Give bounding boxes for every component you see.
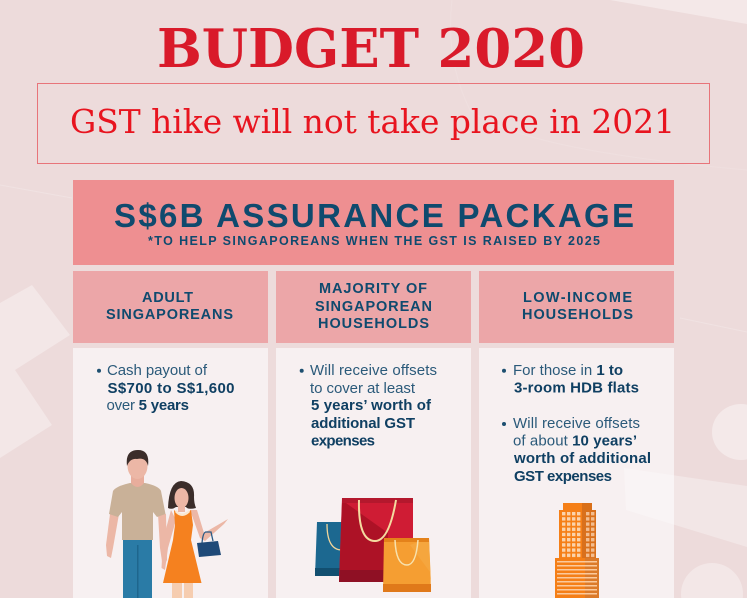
text block: over 5 years — [106, 397, 189, 414]
package note: *TO HELP SINGAPOREANS WHEN THE GST IS RAISED BY 2025 — [148, 234, 600, 248]
text block: Cash payout of — [107, 362, 208, 379]
text block: expenses — [311, 432, 375, 450]
panel: adult singaporeans — [73, 271, 268, 598]
column header — [479, 271, 674, 343]
column header: LOW-INCOME — [523, 290, 632, 306]
text block: 3-room HDB flats — [514, 380, 639, 396]
title: BUDGET 2020 — [157, 18, 585, 80]
icon: HDB tower — [555, 503, 599, 598]
panel: assurance package banner — [73, 180, 674, 265]
text block: GST expenses — [514, 468, 612, 485]
heading: package name: S$6B ASSURANCE PACKAGE — [114, 197, 634, 234]
column header: SINGAPOREANS — [106, 307, 233, 323]
subtitle box — [38, 84, 710, 164]
orange bag — [383, 538, 431, 592]
column body — [479, 348, 674, 598]
text block: to cover at least — [310, 380, 416, 397]
text block: Will receive offsets — [513, 415, 640, 432]
red bag — [339, 498, 413, 582]
text block: Will receive offsets — [310, 362, 437, 379]
text block: worth of additional — [513, 450, 651, 467]
icon: couple — [106, 450, 228, 598]
text block: 5 years’ worth of — [311, 397, 432, 414]
blue bag — [315, 522, 342, 576]
text block — [502, 362, 651, 485]
man — [106, 514, 119, 558]
text block — [97, 362, 234, 414]
text block: For those in 1 to — [513, 362, 623, 379]
column header: ADULT — [142, 290, 193, 306]
subtitle box: GST hike will not take place in 2021 — [70, 102, 675, 141]
text block: S$700 to S$1,600 — [108, 380, 234, 397]
text block: of about 10 years’ — [513, 432, 637, 450]
text block: additional GST — [311, 415, 415, 432]
icon: shopping bags — [315, 498, 431, 592]
column body — [73, 348, 268, 598]
column body — [276, 348, 471, 598]
column header — [276, 271, 471, 343]
column header: HOUSEHOLDS — [522, 307, 633, 323]
text block — [300, 362, 437, 450]
panel: majority of households — [276, 271, 471, 598]
panel: low-income households — [479, 271, 747, 598]
column header: HOUSEHOLDS — [318, 316, 429, 332]
column header: SINGAPOREAN — [315, 299, 432, 315]
woman — [162, 510, 176, 570]
column header: MAJORITY OF — [319, 281, 427, 297]
column header — [73, 271, 268, 343]
handbag — [202, 532, 213, 543]
